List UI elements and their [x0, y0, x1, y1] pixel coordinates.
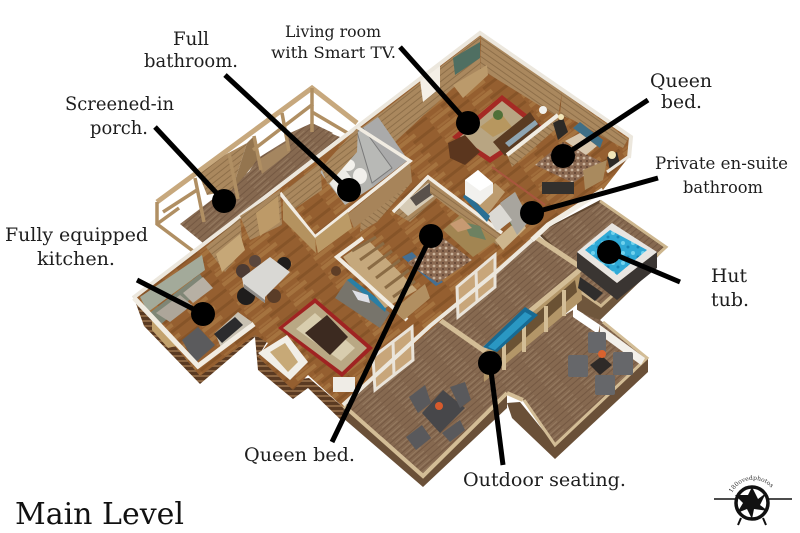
callout: private en-suite bathroom: Private en-suite	[655, 154, 788, 173]
callout: screened-in porch: Screened-in	[65, 94, 174, 115]
staircase	[337, 237, 430, 320]
right queen bedroom	[507, 114, 628, 194]
title: Main Level	[15, 497, 184, 532]
callout: private en-suite bathroom	[520, 154, 788, 225]
dining furniture on deck	[406, 382, 471, 450]
callout: full bathroom	[144, 29, 361, 202]
living rug, ottoman and sofa	[278, 266, 390, 377]
dining table	[236, 255, 291, 305]
callout: full bathroom: bathroom.	[144, 51, 238, 72]
callout: outdoor seating: Outdoor seating.	[463, 470, 626, 491]
callout: queen bed main: Queen bed.	[244, 445, 355, 466]
callout: kitchen: Fully equipped	[5, 225, 148, 246]
kitchen-side wall and shelves	[206, 190, 282, 272]
callout: queen bed right: bed.	[661, 92, 702, 113]
icon: photographer logo: 180ovedphotos	[729, 475, 773, 492]
callout: queen bed right: Queen	[650, 71, 712, 92]
TV and desk	[453, 42, 488, 98]
fully equipped kitchen	[134, 255, 254, 366]
house floor	[134, 33, 630, 407]
small bedroom niche	[280, 127, 412, 253]
callout: kitchen: kitchen.	[37, 249, 115, 270]
deck: central with screen wall	[430, 230, 582, 382]
blue bench	[483, 307, 538, 352]
callout: screened-in porch	[65, 94, 236, 213]
callout: living room	[271, 22, 480, 135]
floor plan illustration	[133, 33, 667, 487]
callout: queen bed main	[244, 224, 443, 466]
callout: living room: Living room	[285, 22, 381, 41]
sliding doors	[343, 240, 532, 405]
hot tub	[577, 223, 657, 301]
callout: living room: with Smart TV.	[271, 43, 396, 62]
callout: outdoor seating	[463, 351, 626, 491]
deck: right seating	[483, 307, 648, 459]
callout: screened-in porch: porch.	[90, 118, 148, 139]
full bathroom	[320, 117, 412, 232]
living room rug and sofas	[448, 95, 547, 165]
master queen bed	[402, 215, 526, 286]
en-suite bathroom and cabinet	[463, 167, 603, 240]
entry alcove and chair	[258, 335, 355, 392]
screened-in porch	[157, 88, 357, 254]
callout: private en-suite bathroom: bathroom	[683, 178, 763, 197]
callout: kitchen	[5, 225, 215, 326]
callout: full bathroom: Full	[173, 29, 209, 50]
callout: hot tub	[597, 240, 749, 311]
deck: hot tub	[537, 200, 667, 322]
deck: main rear	[343, 313, 507, 487]
walk-in closet	[393, 177, 502, 246]
icon: photographer logo	[714, 475, 792, 526]
callout: hot tub: Hut	[711, 266, 748, 287]
living room walls	[133, 33, 631, 298]
callout: queen bed right	[551, 71, 712, 168]
lounge chairs on deck	[568, 332, 633, 395]
callout: hot tub: tub.	[711, 290, 749, 311]
foundation bands	[134, 298, 343, 422]
